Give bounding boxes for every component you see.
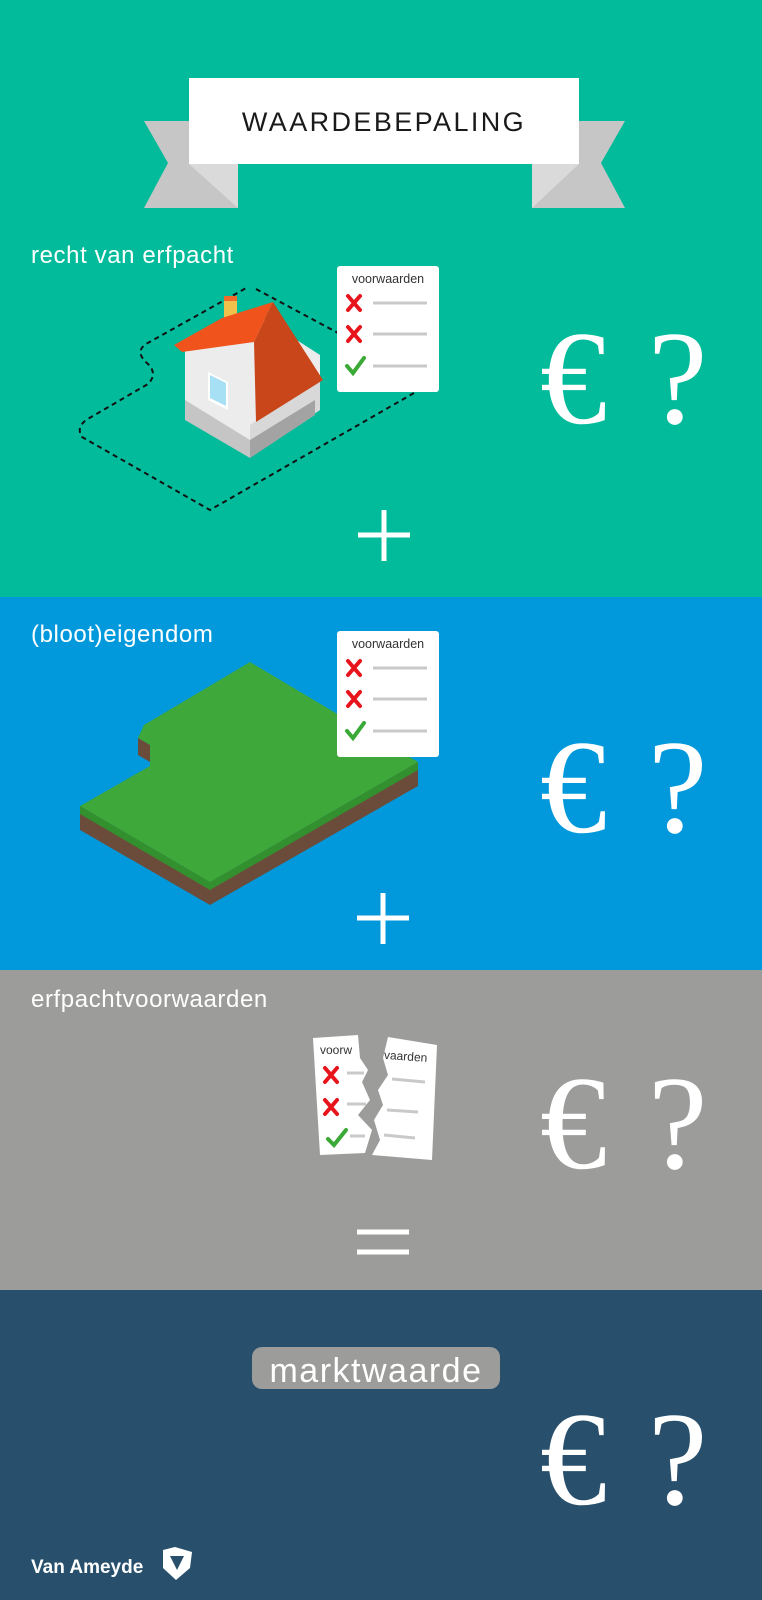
label: (bloot)eigendom: (bloot)eigendom xyxy=(31,621,213,648)
panel: recht van erfpacht xyxy=(0,0,762,597)
value: euro question: € xyxy=(540,1385,607,1533)
checklist: voorwaarden xyxy=(337,631,439,757)
panel: recht van erfpacht: ? xyxy=(648,304,707,452)
value: euro question: € xyxy=(540,713,607,861)
panel: erfpachtvoorwaarden: ? xyxy=(648,1049,707,1197)
panel: (bloot)eigendom xyxy=(0,597,762,970)
equals sign xyxy=(357,1232,409,1252)
logo: Van Ameyde xyxy=(31,1547,192,1580)
panel: (bloot)eigendom: ? xyxy=(648,713,707,861)
label: erfpachtvoorwaarden: erfpachtvoorwaarden xyxy=(31,986,268,1013)
panel: marktwaarde xyxy=(0,1290,762,1600)
label: recht van erfpacht: recht van erfpacht xyxy=(31,242,234,269)
icon: torn conditions xyxy=(313,1035,437,1160)
value: euro question: € xyxy=(540,304,607,452)
panel: marktwaarde: ? xyxy=(648,1385,707,1533)
title ribbon: WAARDEBEPALING xyxy=(242,107,526,137)
value: euro question: € xyxy=(540,1049,607,1197)
plus sign xyxy=(358,510,410,561)
icon: land plot xyxy=(80,662,418,905)
icon: torn conditions: voorw xyxy=(320,1043,352,1057)
dashed lot outline xyxy=(80,287,414,510)
plus sign xyxy=(357,893,409,944)
panel: erfpachtvoorwaarden xyxy=(0,970,762,1290)
icon: torn conditions: vaarden xyxy=(384,1048,428,1065)
label pill: marktwaarde: marktwaarde xyxy=(269,1352,483,1390)
icon: house xyxy=(174,296,323,458)
title ribbon xyxy=(144,78,625,208)
logo: Van Ameyde: Van Ameyde xyxy=(31,1557,143,1578)
checklist: voorwaarden xyxy=(337,266,439,392)
